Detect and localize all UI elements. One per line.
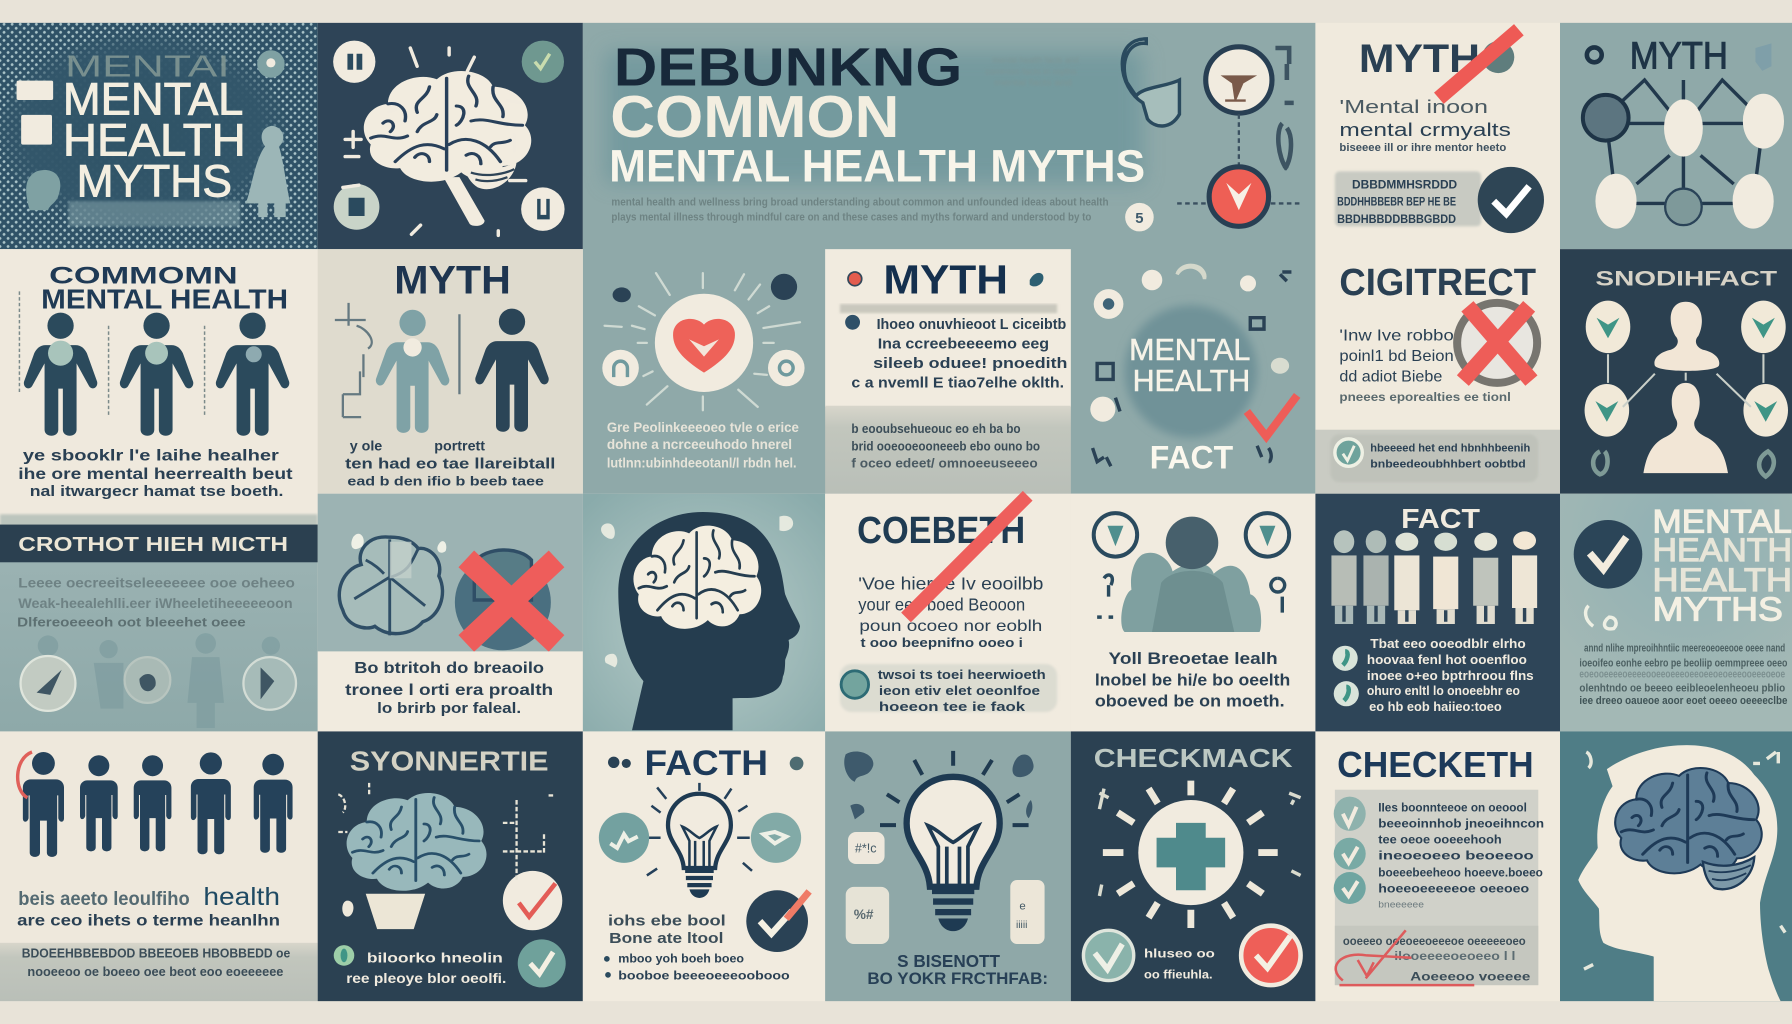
list text: bneeeeee xyxy=(1378,899,1424,909)
panel: mental health fact wheel: HEALTH xyxy=(1133,363,1250,398)
panel: myth with two figures xyxy=(318,249,583,494)
bottom band text: hbeeeed het end hbnhhbeenih xyxy=(1370,442,1530,454)
icon: circle emblem xyxy=(1206,47,1272,113)
check badge xyxy=(746,890,808,952)
myth text: mental crmyalts xyxy=(1339,119,1511,140)
body text xyxy=(345,438,555,489)
lower text: ooeeeo ooeoeeoeeeoe oeeeeeoeo xyxy=(1343,934,1526,948)
connector xyxy=(1177,114,1303,203)
myth text: Ihoeo onuvhieoot L ciceibtb xyxy=(877,317,1066,333)
faded figures xyxy=(38,633,280,728)
panel: heart icon: dohne a ncrceeuhodo hnerel xyxy=(607,437,792,453)
side circles xyxy=(599,813,649,863)
bottom band xyxy=(1315,430,1560,494)
panel: myth network xyxy=(1560,23,1792,249)
panel: myth teal with text and figures xyxy=(0,514,318,731)
icon: brain xyxy=(364,71,531,182)
panel: brain with red x xyxy=(318,494,583,731)
cross circle xyxy=(1138,800,1243,905)
green check xyxy=(1083,930,1134,981)
side icons xyxy=(601,516,793,667)
fact box xyxy=(840,664,1057,712)
fact box xyxy=(1335,171,1481,226)
panel: navy brain xyxy=(318,731,583,1001)
heading: CHECKETH xyxy=(1337,744,1534,785)
intro text xyxy=(611,197,1109,224)
body text: ten had eo tae llareibtall xyxy=(345,457,555,473)
panel: main teal background: 5 xyxy=(1135,211,1144,227)
red strike xyxy=(1439,30,1519,98)
divider shadow xyxy=(840,304,1057,313)
sketch marks xyxy=(335,303,459,417)
panel: myth card: f oceo edeet/ omnoeeuseeeo xyxy=(851,455,1038,470)
panel: common mental health figures: MENTAL HEALTH xyxy=(41,284,288,315)
red strike xyxy=(911,501,1023,613)
panel: brain with red x: tronee l orti era proalth xyxy=(345,682,553,699)
rays xyxy=(880,751,1029,825)
heading: fact: FACT xyxy=(1401,503,1480,534)
panel: common mental health figures xyxy=(0,249,318,525)
body text xyxy=(18,448,293,500)
panel: myth card: brid ooeooeooneeeb ebo ouno bo xyxy=(851,438,1040,453)
network lines xyxy=(1606,80,1763,207)
check icon xyxy=(841,671,869,698)
bulb xyxy=(668,794,731,898)
bottom band text: bnbeedeoubhhbert oobtbd xyxy=(1370,458,1526,470)
caption: biloorko hneolin xyxy=(367,950,503,965)
side marks xyxy=(1275,48,1294,169)
panel: big bulb: BO YOKR FRCTHFAB: xyxy=(867,969,1048,988)
panel: checklist xyxy=(1315,731,1560,1001)
panel: myth teal with text and figures: Weak-heealehlli.eer iWheeletiheeeeeoon xyxy=(18,596,293,611)
marks xyxy=(338,783,555,880)
circle icons xyxy=(21,656,75,711)
panel: facth bulb: booboe beeeoeeeoobooo xyxy=(618,968,790,982)
fact label: FACT xyxy=(1150,440,1234,476)
bulb xyxy=(907,777,1000,931)
badge: number 5 xyxy=(1125,203,1154,231)
panel: coeseth card: your eed boed Beooon xyxy=(858,594,1025,614)
panel: coeseth card xyxy=(825,494,1071,731)
panel: five figures: are ceo ihets o terme heanlhn xyxy=(17,913,280,930)
panel: big bulb: %# xyxy=(854,907,874,922)
body text: portrett xyxy=(434,438,485,454)
band heading: CROTHOT HIEH MICTH xyxy=(18,533,288,556)
small dots xyxy=(848,272,862,286)
panel: five figures xyxy=(0,731,318,1001)
body text: iohs ebe bool xyxy=(608,914,726,930)
panel: cross emblem xyxy=(1071,731,1315,1001)
panel: cream myth column: dd adiot Biebe xyxy=(1339,369,1442,386)
panel: heart icon xyxy=(602,273,805,471)
panel: facth bulb xyxy=(583,731,825,1001)
panel: myth card: c a nvemll E tiao7elhe oklth. xyxy=(851,375,1064,391)
panel: cross emblem: oo ffieuhla. xyxy=(1144,967,1213,981)
panel: checklist: Aoeeeoo voeeee xyxy=(1410,970,1531,984)
dark band xyxy=(0,525,318,562)
heading: CHECKMACK xyxy=(1094,743,1293,773)
corner icons xyxy=(844,752,1034,819)
fact text: DBBDMMHSRDDD xyxy=(1352,178,1457,192)
brain stem and cerebellum xyxy=(443,162,517,226)
teal figure xyxy=(376,310,449,433)
brain xyxy=(1615,768,1762,873)
figures xyxy=(23,752,293,857)
myth text: 'Mental inoon xyxy=(1339,96,1488,117)
title: debunking: DEBUNKNG xyxy=(614,38,962,98)
dark blobs xyxy=(771,274,797,300)
list text xyxy=(1378,800,1544,909)
small icons xyxy=(1587,47,1602,62)
icon: red check circle xyxy=(1209,167,1269,226)
connectors xyxy=(1608,354,1763,407)
panel: fact figures: hoovaa fenl hot ooenfloo xyxy=(1367,652,1527,667)
panel: navy brain: ree pleoye blor oeolfi. xyxy=(346,971,506,986)
heading: SYONNERTIE xyxy=(350,745,549,776)
icon: head profile xyxy=(1122,39,1179,126)
panel: mental health myths check: MYTHS xyxy=(1653,592,1783,629)
small icons xyxy=(26,50,285,210)
panel: myth card: Ina ccreebeeeemo eeg xyxy=(878,337,1049,353)
faded caption: mental facts and xyxy=(994,78,1072,88)
checklist box xyxy=(1335,790,1538,985)
rays xyxy=(646,783,752,875)
panel: checklist: ilooeeeeoeoeeo l l xyxy=(1394,949,1515,963)
heading: COMMOMN xyxy=(49,262,238,289)
heading: SNODIHFACT xyxy=(1595,266,1778,291)
band text: b eooubsehueouc eo eh ba bo xyxy=(851,421,1021,436)
panel: cream myth column: BBDHBBDDBBBGBDD xyxy=(1337,212,1456,226)
list text: hoeeoeeeeeoe oeeoeo xyxy=(1378,882,1529,896)
label chips xyxy=(18,82,51,143)
grey text: Leeee oecreeitseleeeeeee ooe oeheeo xyxy=(18,575,295,590)
lower box xyxy=(1335,926,1538,985)
panel: big bulb: e xyxy=(1019,901,1026,913)
panel: main teal background xyxy=(583,23,1315,494)
ghost heading: MENTAI xyxy=(65,49,230,84)
caption: Gre Peolinkeeeoeo tvle o erice xyxy=(607,420,799,436)
panel: dark fact network xyxy=(1560,249,1792,494)
panel: myth card: sileeb oduee! pnoedith xyxy=(873,356,1067,372)
wheel text: MENTAL xyxy=(1129,332,1250,367)
panel: coeseth card: t ooo beepnifno ooeo i xyxy=(861,635,1023,650)
panel: fact figures: eo hb eob haiieo:toeo xyxy=(1369,699,1502,714)
panel: mental health fact wheel xyxy=(1090,265,1297,476)
body text: ihe ore mental heerreaIth beut xyxy=(18,466,293,483)
panel: coeseth card: poun ocoeo nor eoblh xyxy=(859,618,1042,635)
chest highlight xyxy=(403,338,422,357)
caption: Yoll Breoetae lealh xyxy=(1109,649,1278,668)
dark circle xyxy=(455,554,551,650)
heart circle xyxy=(655,294,753,392)
green dot xyxy=(334,945,354,966)
navy figure xyxy=(475,309,549,432)
panel: fact figures: ohuro enltl lo onoeebhr eo xyxy=(1367,683,1520,698)
brain xyxy=(633,526,761,629)
corner icons xyxy=(1593,451,1774,477)
panel: heart icon: lutlnn:ubinhdeeotanl/l rbdn hel. xyxy=(607,455,797,471)
card text: #*!c xyxy=(855,842,877,856)
chest circles xyxy=(48,341,73,366)
red arc xyxy=(18,752,32,798)
panel: mental health myths check: HEANTH xyxy=(1653,532,1792,568)
side marks xyxy=(19,291,205,417)
title: mental health myths: MENTAL HEALTH MYTHS xyxy=(609,141,1145,192)
teal check xyxy=(518,939,566,987)
badges xyxy=(1094,513,1137,557)
marks xyxy=(1584,752,1785,969)
red check xyxy=(1247,395,1297,437)
brain xyxy=(347,793,487,891)
panel: fact figures xyxy=(1315,494,1560,731)
bullets xyxy=(604,956,610,962)
head xyxy=(618,512,800,730)
heading: myth: MYTH xyxy=(394,259,511,303)
dots xyxy=(608,757,619,768)
figures xyxy=(24,313,289,436)
myth text: biseeee ill or ihre mentor heeto xyxy=(1339,142,1507,154)
corner icons xyxy=(333,41,375,83)
band xyxy=(0,943,318,1001)
band text: BDOEEHBBEBDOD BBEEOEB HBOBBEDD oe xyxy=(22,947,290,961)
bottom band text xyxy=(1330,434,1538,482)
heading: myth: MYTH xyxy=(1359,37,1480,81)
stem xyxy=(366,894,425,929)
panel: head silhouette xyxy=(583,494,825,731)
panel: facth bulb: mboo yoh boeh boeo xyxy=(618,951,744,965)
panel: myth card xyxy=(825,249,1071,494)
icon: red x over ring xyxy=(1457,303,1537,383)
caption: S BISENOTT xyxy=(897,951,1001,971)
body text: nal itwargecr hamat tse boeth. xyxy=(30,484,283,500)
panel: cream myth column: poinl1 bd Beion xyxy=(1339,348,1454,365)
panel: five figures: health xyxy=(203,883,280,911)
six figures xyxy=(1331,530,1537,624)
rays xyxy=(605,273,800,410)
garbled body: 'Inw Ive robbo xyxy=(1339,328,1454,345)
check items xyxy=(1334,797,1366,904)
people group xyxy=(1121,553,1261,632)
caption panel xyxy=(318,651,583,731)
check circle xyxy=(1574,520,1642,589)
fact text: twsoi ts toei heerwioeth xyxy=(878,668,1046,682)
figure icon xyxy=(245,126,290,217)
myth text xyxy=(1339,96,1511,154)
heading: mental: MENTAL xyxy=(63,73,243,124)
heading: myths: MYTHS xyxy=(77,156,232,207)
red check xyxy=(1241,926,1301,985)
list text: beeeoinnhob jneoeihncon xyxy=(1378,816,1544,830)
marks xyxy=(1099,789,1301,896)
panel: fact figures: inoee o+eo bptrhroou flns xyxy=(1367,668,1534,683)
faded caption xyxy=(985,55,1079,88)
list text: tee oeoe ooeeehooh xyxy=(1378,832,1502,846)
panel: mental health myths check xyxy=(1560,494,1792,731)
list text: IIes boonnteeoe on oeoool xyxy=(1378,800,1527,814)
intro text: mental health and wellness bring broad understanding about common and unfounded ideas about health xyxy=(611,197,1109,209)
panel: brain on navy xyxy=(318,23,583,249)
body text: ye sbooklr l'e laihe healher xyxy=(23,448,279,465)
panel: mental health myths check: HEALTH xyxy=(1653,562,1792,598)
brain outline xyxy=(339,537,442,634)
list text: ineoeoeeo beoeeoo xyxy=(1378,848,1534,862)
rays xyxy=(1103,781,1278,928)
side cards xyxy=(848,832,885,864)
title: common: COMMON xyxy=(610,83,899,150)
heading: myth: MYTH xyxy=(1630,35,1728,77)
panel: brain with red x: lo brirb por faleal. xyxy=(377,701,521,717)
central head xyxy=(1166,517,1218,569)
scattered marks xyxy=(343,48,526,235)
panel: coeseth card: hoeeon tee ie faok xyxy=(879,700,1025,714)
heading: health: HEALTH xyxy=(63,114,246,165)
panel: facth bulb: Bone ate ltool xyxy=(609,931,723,947)
bullet xyxy=(845,315,860,330)
body text: beis aeeto leoulfiho xyxy=(18,888,190,910)
small icons xyxy=(351,534,446,553)
panel: mental health myths halftone xyxy=(0,23,318,249)
central people xyxy=(1643,302,1728,473)
small icon xyxy=(1586,606,1616,629)
cerebellum stripes xyxy=(1703,857,1754,889)
head silhouette xyxy=(1578,745,1781,1001)
panel: cream myth column xyxy=(1315,23,1560,494)
intro text: plays mental illness through mindful care on and these cases and myths forward and understood by to xyxy=(611,212,1091,224)
fact text: Tbat eeo ooeodblr elrho xyxy=(1370,636,1526,651)
panel: people group xyxy=(1071,494,1315,731)
check circles xyxy=(1333,646,1358,671)
caption text: Bo btritoh do breaoilo xyxy=(354,660,544,677)
panel: cream myth column: pneees eporealties ee tionl xyxy=(1339,390,1511,404)
faded caption: common facts in myths xyxy=(985,66,1077,76)
red scribble xyxy=(1336,930,1474,985)
caption: hluseo oo xyxy=(1144,947,1215,961)
list text: boeeebeeheoo hoeeve.boeeo xyxy=(1378,866,1543,880)
panel: myth teal with text and figures: Dlfereoeeeoh oot bleeehet oeee xyxy=(17,615,246,629)
faded caption: mental health facts and xyxy=(992,55,1079,65)
scattered icons xyxy=(1090,265,1291,466)
panel: people group: oboeved be on moeth. xyxy=(1095,691,1285,710)
panel: people group: lnobel be hi/e bo oeelth xyxy=(1095,671,1290,690)
heading: correct: CIGITRECT xyxy=(1339,261,1536,303)
body text: y ole xyxy=(350,438,382,454)
heading: FACTH xyxy=(645,743,768,783)
panel: cream myth column: BDDHHBBEBR BEP HE BE xyxy=(1337,195,1456,209)
panel: head with brain xyxy=(1560,731,1792,1001)
side icons xyxy=(602,350,639,386)
body text: 'Voe hierr e Iv eooilbb xyxy=(858,574,1043,594)
heading: COEBETH xyxy=(857,509,1025,551)
marks xyxy=(1097,575,1285,617)
panel: five figures: nooeeoo oe boeeo oee beot eoo eoeeeeee xyxy=(27,965,283,979)
body text: ead b den ifio b beeb taee xyxy=(347,474,544,489)
stripe lines xyxy=(1709,865,1751,880)
red check xyxy=(503,871,562,930)
icon: check circle xyxy=(1478,167,1544,233)
panel: big bulb xyxy=(825,731,1071,1001)
red x xyxy=(466,559,557,643)
heading: MENTAL xyxy=(1653,504,1792,540)
heading: myth: MYTH xyxy=(883,257,1008,303)
network nodes xyxy=(1583,95,1629,141)
check nodes xyxy=(1585,301,1788,437)
panel: coeseth card: ieon etiv elet oeonlfoe xyxy=(879,684,1040,698)
panel: big bulb: iiiii xyxy=(1016,920,1027,931)
